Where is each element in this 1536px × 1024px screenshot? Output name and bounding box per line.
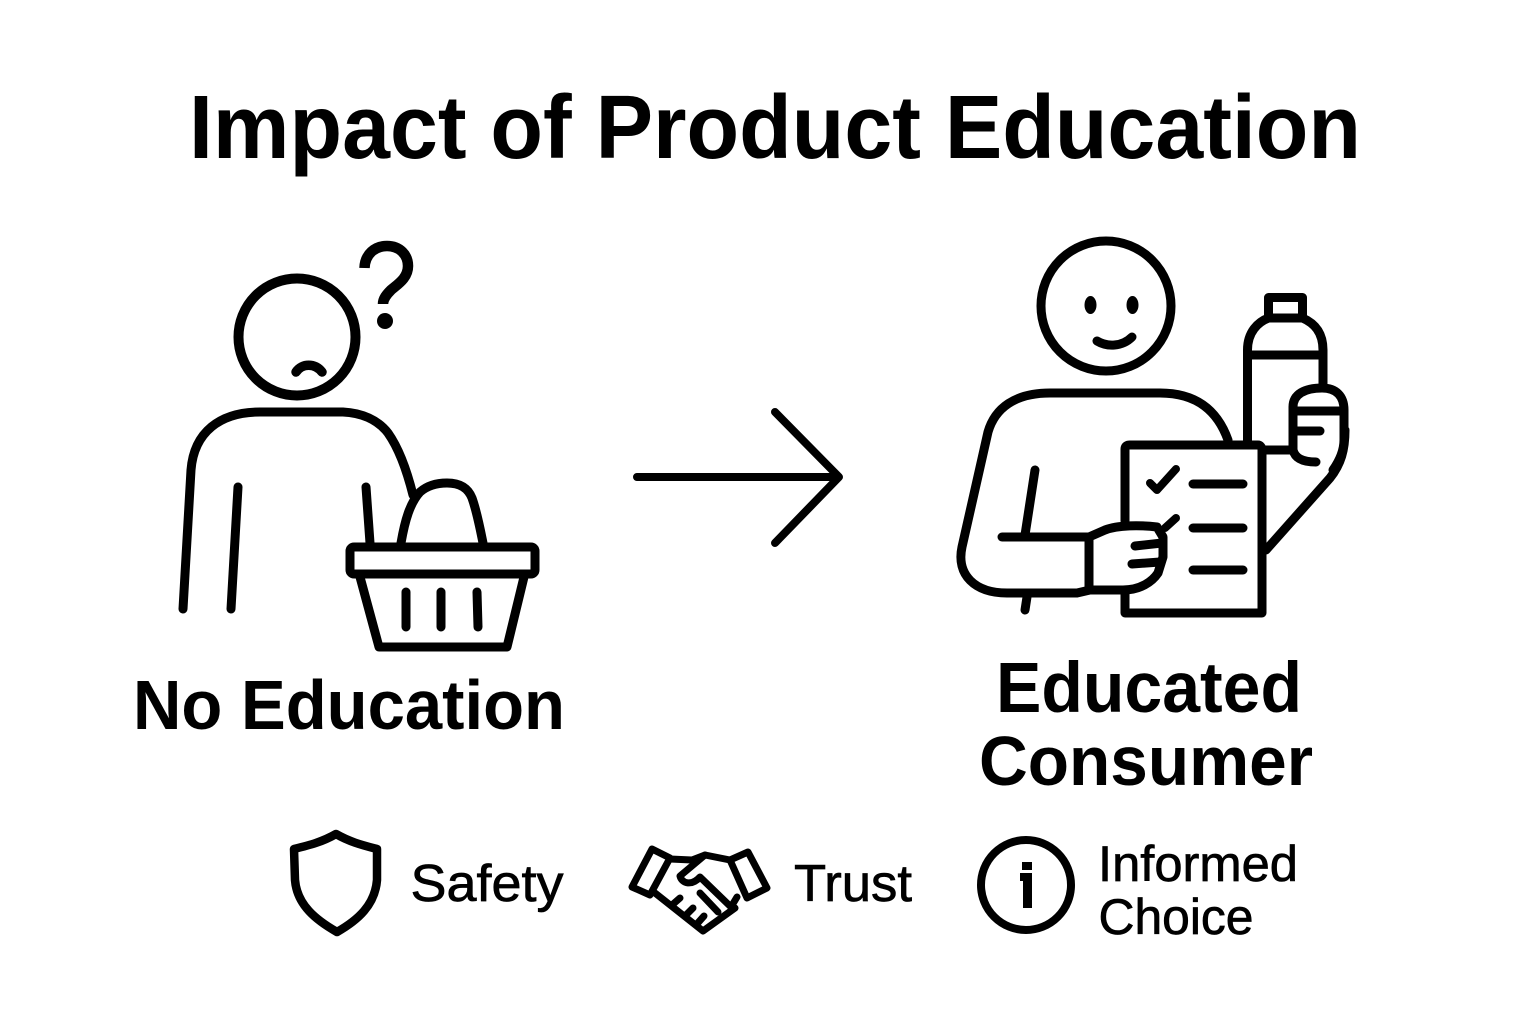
icon: happy head [1041, 241, 1171, 371]
label: educated consumer: Educated [996, 649, 1302, 728]
title: Impact of Product Education [189, 78, 1361, 178]
icon: question mark [364, 246, 408, 329]
happy person body [961, 393, 1345, 610]
label: safety: Safety [410, 855, 564, 913]
icon: shopping basket [350, 483, 535, 647]
label: informed choice: Informed [1098, 836, 1298, 892]
label: informed choice [1098, 836, 1298, 945]
label: informed choice: Choice [1098, 889, 1254, 945]
icon: shield [294, 834, 377, 932]
arrow [637, 412, 839, 543]
label: educated consumer [979, 649, 1313, 800]
icon: sad head [238, 278, 356, 396]
sad person body [183, 412, 413, 609]
icon: information [981, 840, 1071, 930]
icon: checklist clipboard [1125, 445, 1262, 613]
label: trust: Trust [794, 855, 913, 913]
icon: handshake [632, 849, 767, 931]
icon: hand holding list [1089, 526, 1163, 590]
panel: educated consumer figure [961, 241, 1345, 613]
label: no education: No Education [133, 666, 565, 744]
panel: no education figure [183, 246, 535, 647]
icon: bottle [1248, 298, 1344, 470]
label: educated consumer: Consumer [979, 722, 1313, 800]
